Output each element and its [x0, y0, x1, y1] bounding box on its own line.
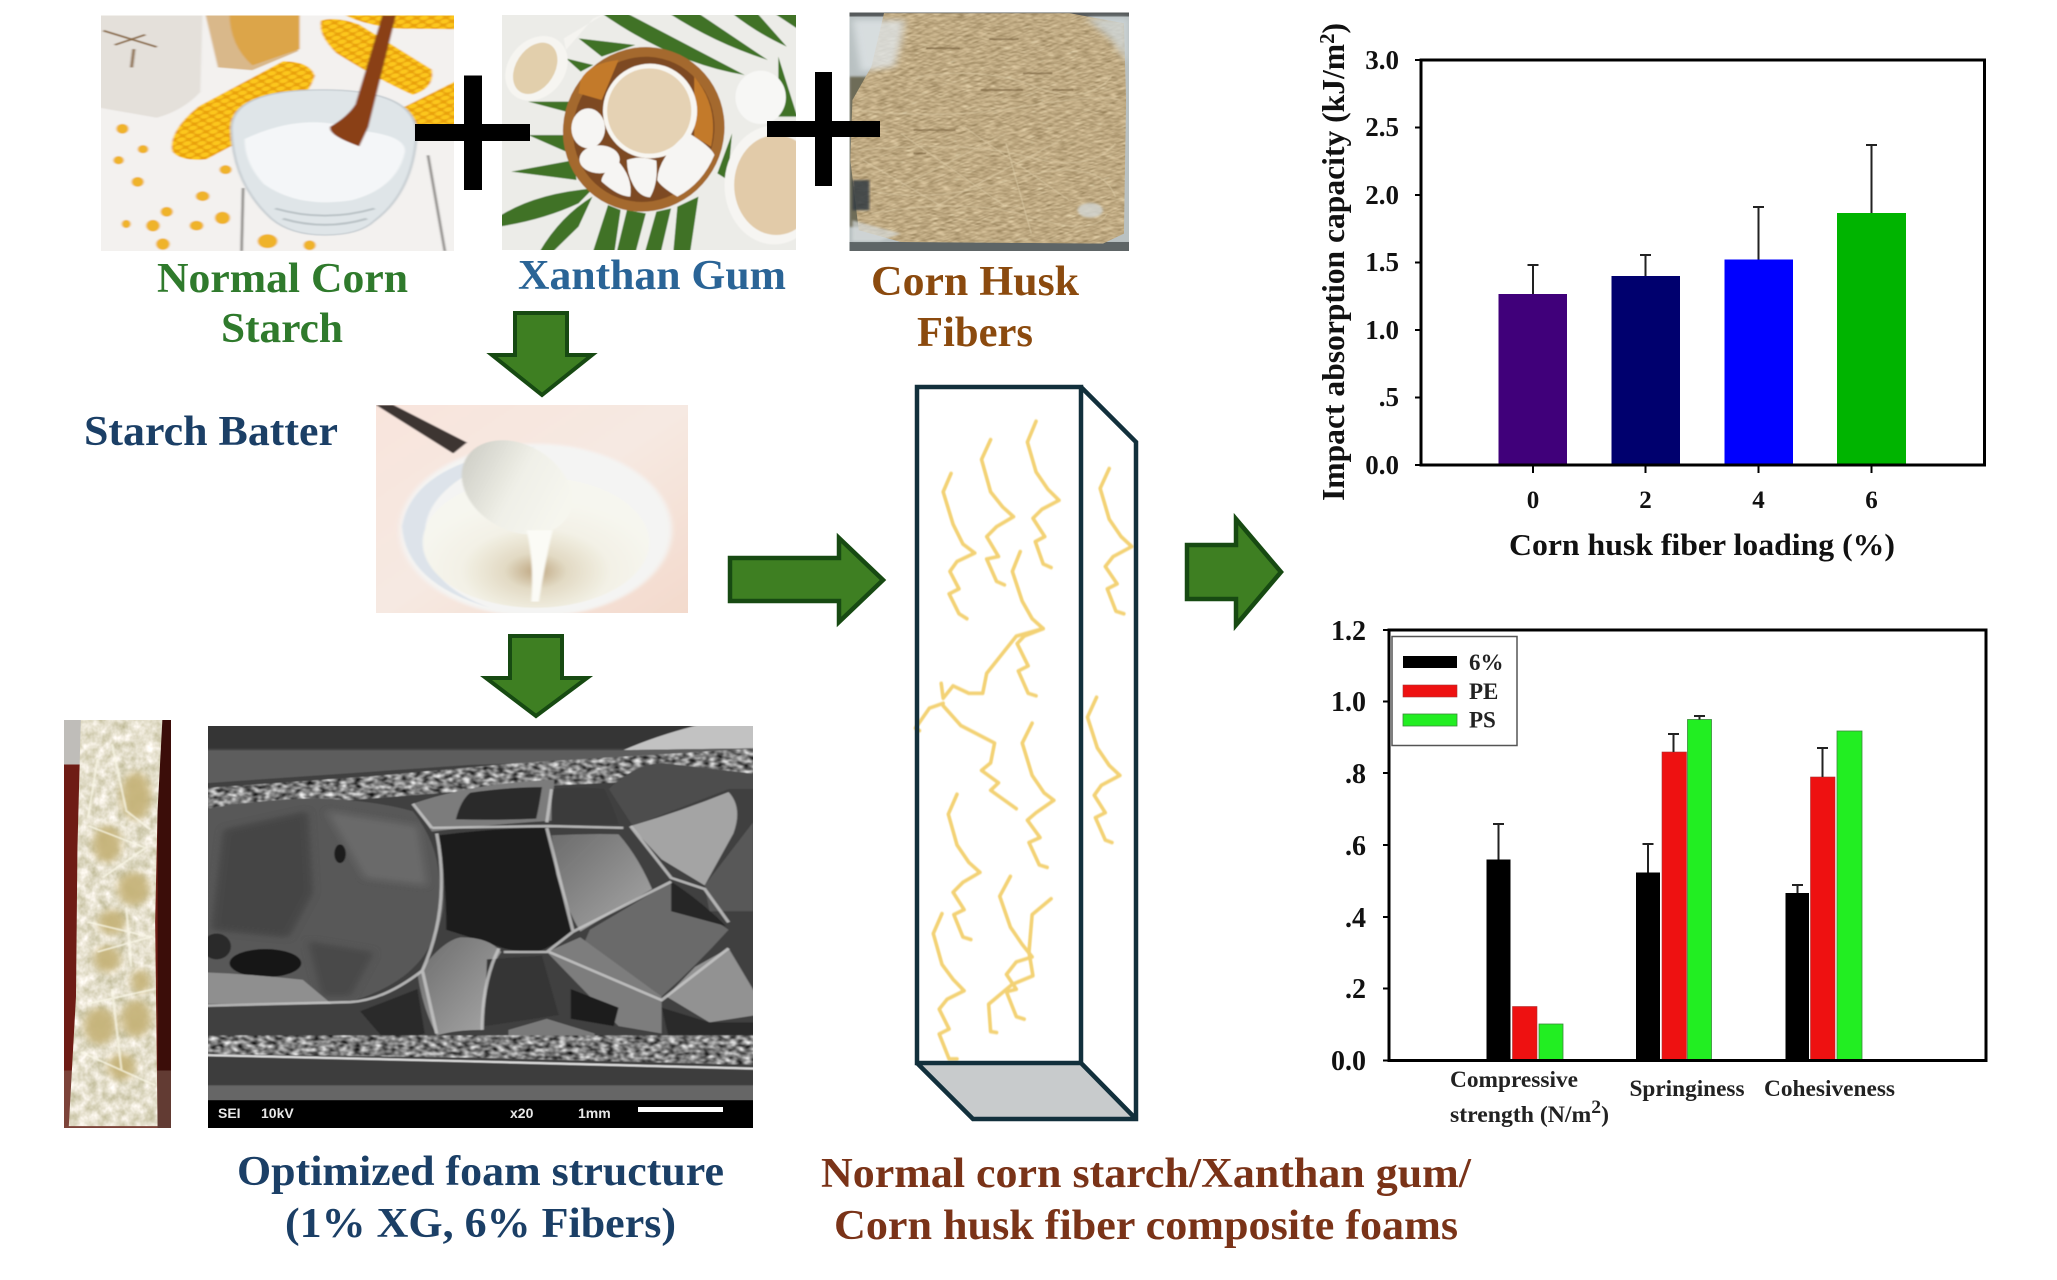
chart: compressive strength, springiness and cohesiveness bars: .4 [1345, 903, 1366, 934]
heading: optimized foam structure: (1% XG, 6% Fibers) [285, 1201, 676, 1247]
arrow: down to foam structure [486, 636, 587, 716]
label: SEM data bar [218, 1105, 723, 1121]
heading: corn husk fibers: Fibers [917, 310, 1033, 356]
chart: compressive strength, springiness and cohesiveness bars: .2 [1345, 974, 1366, 1005]
heading: optimized foam structure [237, 1149, 724, 1247]
chart: impact absorption capacity bar chart: 3.0 [1365, 45, 1399, 75]
legend: PS [1469, 708, 1496, 732]
chart: compressive strength, springiness and cohesiveness bars: Springiness [1630, 1076, 1745, 1101]
chart: compressive strength, springiness and cohesiveness bars: Cohesiveness [1764, 1076, 1895, 1101]
chart: compressive strength, springiness and cohesiveness bars [1331, 616, 1986, 1127]
icon: plus sign 1 [415, 76, 530, 190]
chart: impact absorption capacity bar chart: 2.5 [1365, 112, 1399, 142]
label: SEM data bar: 10kV [261, 1105, 294, 1121]
chart: impact absorption capacity bar chart: 2 [1315, 34, 1339, 44]
chart: compressive strength, springiness and cohesiveness bars: strength (N/m [1450, 1102, 1587, 1127]
heading: normal corn starch: Normal Corn [157, 256, 408, 302]
image: SEM micrograph of foam [208, 726, 753, 1128]
chart: compressive strength, springiness and cohesiveness bars: .8 [1345, 759, 1366, 790]
heading: composite foams caption [821, 1151, 1472, 1249]
heading: xanthan gum: Xanthan Gum [518, 253, 786, 299]
image: normal corn starch [101, 16, 454, 251]
chart: impact absorption capacity bar chart: 0.0 [1365, 450, 1399, 480]
legend: PE [1469, 679, 1498, 704]
arrow: down to batter [492, 313, 592, 395]
chart: impact absorption capacity bar chart [1315, 23, 1984, 562]
heading: corn husk fibers [871, 259, 1080, 356]
chart: impact absorption capacity bar chart: 1.0 [1365, 315, 1399, 345]
arrow: right to composite foam [730, 538, 883, 622]
heading: normal corn starch: Starch [221, 306, 343, 352]
heading: normal corn starch [157, 256, 408, 352]
chart: impact absorption capacity bar chart: 1.5 [1365, 247, 1399, 277]
chart: compressive strength, springiness and cohesiveness bars: 1.2 [1331, 616, 1366, 647]
heading: composite foams caption: Corn husk fiber composite foams [834, 1203, 1458, 1249]
image: starch batter [376, 405, 688, 613]
chart: compressive strength, springiness and cohesiveness bars: ) [1601, 1102, 1609, 1127]
chart: impact absorption capacity bar chart: Impact absorption capacity (kJ/m [1315, 38, 1351, 501]
image: xanthan gum [502, 15, 796, 250]
chart: impact absorption capacity bar chart: 6 [1865, 487, 1878, 514]
heading: starch batter: Starch Batter [84, 409, 338, 455]
chart: compressive strength, springiness and cohesiveness bars: 1.0 [1331, 687, 1366, 718]
image: foam specimen photo [64, 720, 171, 1128]
legend [1392, 636, 1517, 746]
chart: compressive strength, springiness and cohesiveness bars: .6 [1345, 831, 1366, 862]
chart: impact absorption capacity bar chart: 2.0 [1365, 180, 1399, 210]
chart: impact absorption capacity bar chart: .5 [1379, 382, 1399, 412]
label: SEM data bar: 1mm [578, 1105, 611, 1121]
label: SEM data bar: SEI [218, 1105, 241, 1121]
chart: impact absorption capacity bar chart: ) [1315, 23, 1351, 34]
legend: 6% [1469, 650, 1504, 675]
image: corn husk fibers [850, 12, 1129, 251]
icon: plus sign 2 [767, 72, 880, 186]
label: SEM data bar: x20 [510, 1105, 534, 1121]
heading: corn husk fibers: Corn Husk [871, 259, 1080, 305]
chart: compressive strength, springiness and cohesiveness bars: Compressive [1450, 1067, 1578, 1092]
chart: impact absorption capacity bar chart: 4 [1752, 487, 1765, 514]
heading: optimized foam structure: Optimized foam structure [237, 1149, 724, 1195]
chart: compressive strength, springiness and cohesiveness bars: 2 [1591, 1097, 1601, 1118]
arrow: right to charts [1187, 519, 1281, 625]
chart: impact absorption capacity bar chart: 2 [1639, 487, 1652, 514]
chart: compressive strength, springiness and cohesiveness bars: 0.0 [1331, 1046, 1366, 1077]
heading: composite foams caption: Normal corn starch/Xanthan gum/ [821, 1151, 1472, 1197]
chart: impact absorption capacity bar chart: 0 [1527, 487, 1539, 514]
diagram: composite foam block with fibers [915, 387, 1136, 1119]
chart: impact absorption capacity bar chart: Corn husk fiber loading (%) [1509, 527, 1895, 562]
